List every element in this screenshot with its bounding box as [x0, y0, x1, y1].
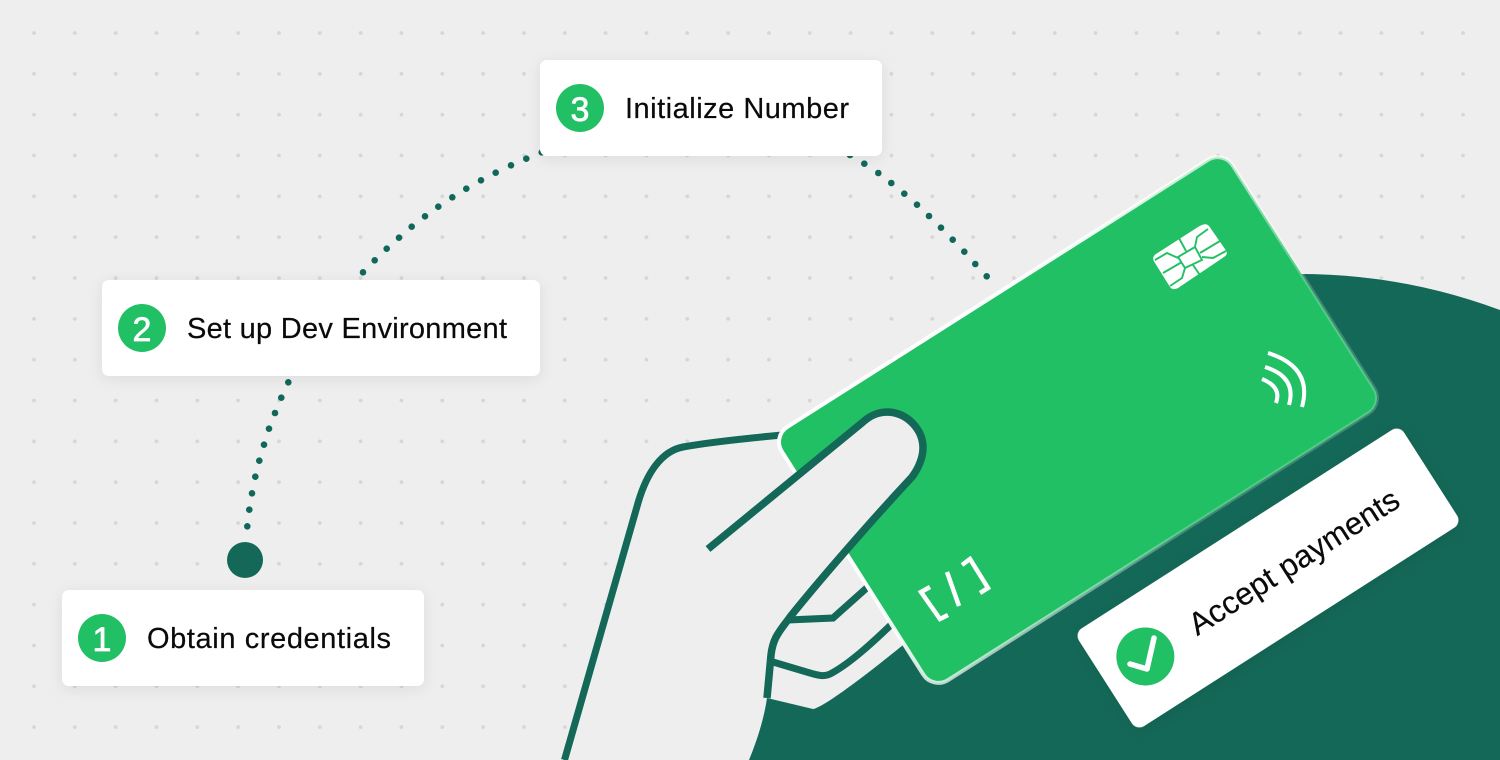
start point dot [227, 542, 263, 578]
step 1 label: Obtain credentials [147, 623, 391, 655]
thumb [708, 412, 923, 698]
step 1 label [62, 590, 424, 686]
hand outer outline [564, 435, 782, 760]
step 3 label: Initialize Number [625, 93, 849, 125]
step 2 label: 2 [133, 311, 151, 349]
accept payments label [1074, 425, 1462, 731]
hand palm fill [563, 420, 960, 760]
accept payments label: Accept payments [1182, 481, 1406, 642]
icon: contactless waves [1262, 353, 1304, 407]
step 2 label: Set up Dev Environment [187, 313, 507, 345]
step 3 label [540, 60, 882, 156]
icon: card logo brackets [921, 559, 988, 619]
step 1 label: 1 [93, 621, 111, 659]
dotted connector: step 2 to step 3 [360, 149, 545, 276]
icon: check mark [1105, 616, 1185, 697]
step 3 label: 3 [571, 91, 589, 129]
dark green background circle [734, 274, 1500, 760]
dotted connector: step 1 to step 2 [244, 379, 292, 530]
dotted connector: step 3 to card [847, 152, 990, 280]
credit card [772, 150, 1384, 690]
finger lines [773, 585, 893, 676]
step 2 label [102, 280, 540, 376]
icon: card chip [1153, 224, 1227, 289]
